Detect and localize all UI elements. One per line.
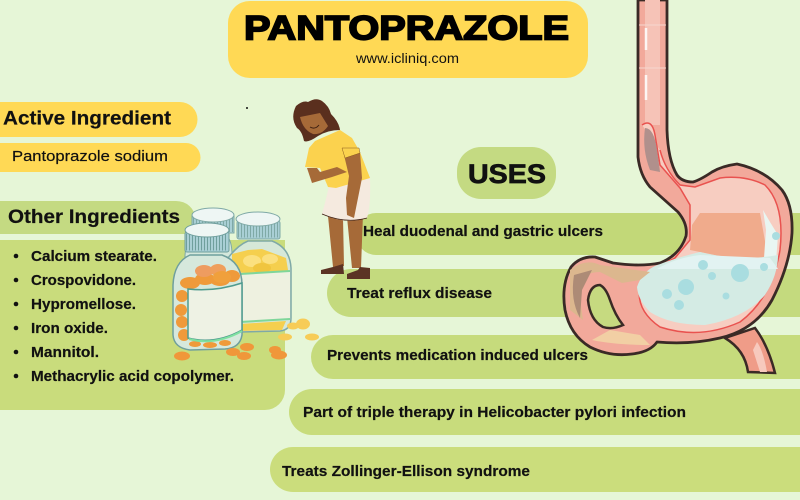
ingredients list: Crospovidone. [31, 272, 136, 289]
use 1: Heal duodenal and gastric ulcers [363, 223, 603, 240]
pyloric loop [570, 262, 650, 320]
active ingredient heading: Active Ingredient [3, 108, 172, 130]
uses heading: USES [468, 159, 546, 189]
other ingredients panel [0, 201, 285, 410]
esophagus segment marks [639, 25, 666, 68]
ingredients list: Methacrylic acid copolymer. [31, 368, 234, 385]
gastric fluid [637, 252, 778, 325]
ingredients list: Iron oxide. [31, 320, 108, 337]
shoes [321, 264, 344, 274]
use 3: Prevents medication induced ulcers [327, 347, 588, 364]
icon: medicine bottles [173, 208, 319, 360]
use 5: Treats Zollinger-Ellison syndrome [282, 463, 530, 480]
other ingredients heading [0, 201, 195, 234]
ingredients list [0, 240, 285, 410]
active ingredient panel [0, 102, 200, 172]
orange contents [690, 213, 768, 260]
active ingredient value [0, 143, 200, 172]
bubbles [662, 232, 780, 310]
use 3 [311, 335, 800, 379]
uses bars [270, 213, 800, 492]
forearm [307, 167, 347, 183]
use 2: Treat reflux disease [347, 285, 492, 302]
use 1 [356, 213, 800, 255]
esophagus highlight [645, 0, 660, 125]
uses heading [457, 147, 556, 199]
ingredients list: Mannitol. [31, 344, 99, 361]
loop opening [588, 285, 623, 328]
title: PANTOPRAZOLE [244, 10, 569, 48]
website: www.icliniq.com [355, 51, 459, 66]
active ingredient heading [0, 102, 198, 137]
ingredients list: Calcium stearate. [31, 248, 157, 265]
front bottle [173, 223, 242, 350]
legs [328, 216, 344, 267]
other ingredients heading: Other Ingredients [8, 207, 180, 228]
small dot [246, 107, 248, 109]
shirt [305, 130, 370, 188]
inner lining [639, 123, 781, 332]
far arm [344, 152, 362, 218]
stomach outer wall [564, 0, 792, 355]
back bottle [185, 208, 234, 300]
duodenum outflow [725, 328, 775, 373]
sleeve [342, 148, 360, 158]
skirt [322, 177, 370, 221]
icon: woman holding stomach [293, 99, 370, 279]
use 4: Part of triple therapy in Helicobacter pylori infection [303, 404, 686, 421]
use 4 [289, 389, 800, 435]
hair [293, 99, 340, 141]
icon: stomach and esophagus illustration [564, 0, 792, 373]
use 2 [327, 269, 800, 317]
ingredients list: Hypromellose. [31, 296, 136, 313]
gastric pocket [644, 128, 660, 172]
face [300, 113, 328, 134]
right bottle [228, 212, 291, 332]
active ingredient value: Pantoprazole sodium [12, 148, 168, 165]
title banner [228, 1, 588, 78]
loose tablets [174, 318, 319, 360]
use 5 [270, 447, 800, 492]
white foam [763, 210, 778, 262]
